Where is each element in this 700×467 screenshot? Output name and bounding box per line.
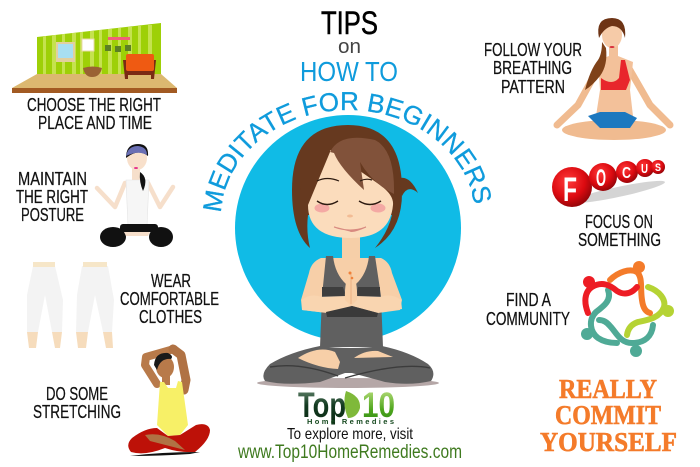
label: really commit yourself: YOURSELF bbox=[540, 427, 677, 457]
central meditating girl bbox=[257, 125, 439, 388]
icon: FOCUS balls bbox=[552, 159, 666, 209]
label: focus on something bbox=[578, 212, 661, 250]
icon: FOCUS balls: U bbox=[641, 161, 648, 176]
label: maintain the right posture: MAINTAIN bbox=[18, 169, 87, 189]
title: MEDITATE FOR BEGINNERS bbox=[203, 92, 491, 212]
label: wear comfortable clothes: COMFORTABLE bbox=[120, 289, 219, 309]
label: wear comfortable clothes bbox=[120, 271, 219, 327]
label: find a community bbox=[486, 290, 570, 329]
label: maintain the right posture: THE RIGHT bbox=[16, 187, 88, 207]
icon: white capri pants bbox=[27, 262, 114, 348]
label: focus on something: SOMETHING bbox=[578, 230, 661, 250]
label: follow your breathing pattern: PATTERN bbox=[501, 77, 565, 97]
label: do some stretching bbox=[33, 384, 121, 422]
label: really commit yourself: REALLY bbox=[559, 374, 657, 404]
logo: Top 10 Home Remedies: Top bbox=[298, 386, 346, 425]
label: do some stretching: DO SOME bbox=[46, 384, 108, 404]
label: do some stretching: STRETCHING bbox=[33, 402, 121, 422]
icon: FOCUS balls: F bbox=[563, 171, 577, 209]
title: HOW TO bbox=[300, 56, 398, 87]
icon: woman maintaining posture bbox=[97, 144, 173, 247]
label: really commit yourself bbox=[540, 374, 677, 457]
title: on bbox=[338, 36, 361, 58]
title: TIPS bbox=[321, 5, 378, 41]
icon: FOCUS balls: C bbox=[622, 165, 631, 182]
icon: FOCUS balls: S bbox=[655, 162, 661, 174]
icon: FOCUS balls: O bbox=[596, 165, 606, 192]
blue circle backdrop bbox=[235, 115, 461, 341]
label: choose the right place and time: CHOOSE THE RIGHT bbox=[27, 95, 161, 115]
logo: Top 10 Home Remedies: Home Remedies bbox=[307, 417, 394, 426]
label: maintain the right posture bbox=[16, 169, 88, 225]
label: choose the right place and time bbox=[27, 95, 161, 133]
icon: room bbox=[12, 23, 177, 93]
icon: woman breathing cross-legged bbox=[557, 18, 670, 140]
label: wear comfortable clothes: WEAR bbox=[151, 271, 191, 291]
icon: woman stretching bbox=[128, 349, 210, 456]
label: find a community: COMMUNITY bbox=[486, 309, 570, 329]
icon: community of people bbox=[581, 261, 674, 357]
label: choose the right place and time: PLACE AND TIME bbox=[38, 113, 152, 133]
label: maintain the right posture: POSTURE bbox=[21, 205, 84, 225]
label: follow your breathing pattern: FOLLOW YOUR bbox=[484, 40, 582, 60]
title bbox=[203, 5, 491, 212]
label: focus on something: FOCUS ON bbox=[585, 212, 653, 232]
text: to explore more: To explore more, visit bbox=[287, 426, 413, 443]
label: follow your breathing pattern bbox=[484, 40, 582, 97]
label: find a community: FIND A bbox=[506, 290, 551, 310]
label: really commit yourself: COMMIT bbox=[555, 400, 661, 430]
label: follow your breathing pattern: BREATHING bbox=[493, 58, 572, 78]
text: website: www.Top10HomeRemedies.com bbox=[237, 442, 462, 463]
label: wear comfortable clothes: CLOTHES bbox=[139, 307, 202, 327]
logo: Top 10 Home Remedies bbox=[298, 386, 395, 426]
logo: Top 10 Home Remedies: 10 bbox=[362, 386, 395, 425]
